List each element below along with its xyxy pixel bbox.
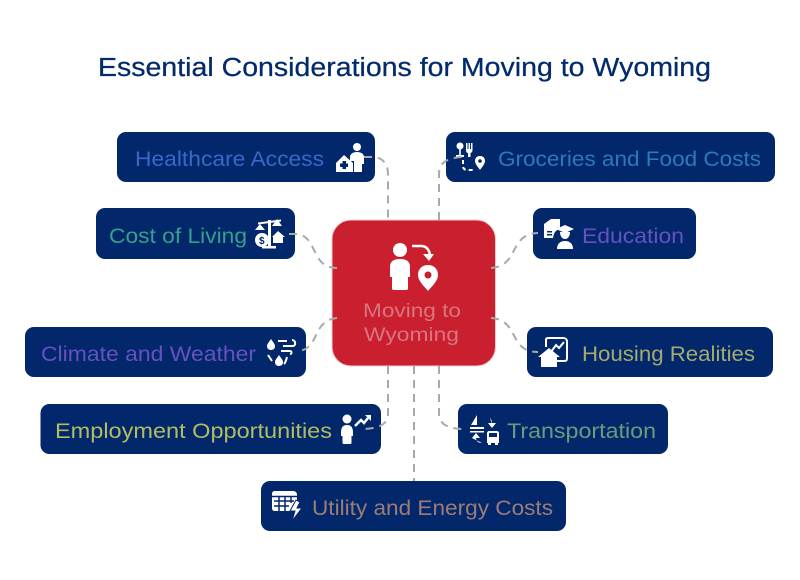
panel: employment opportunities [40, 404, 381, 454]
panel: cost of living: Cost of Living [109, 225, 247, 248]
center label: Wyoming [364, 324, 459, 346]
panel: groceries and food costs [446, 132, 775, 182]
icon: employment growth [341, 414, 371, 444]
panel: utility and energy costs [261, 481, 566, 531]
icon: healthcare [336, 143, 364, 172]
center label [363, 300, 461, 346]
panel: central hub [332, 220, 496, 366]
panel: utility and energy costs: Utility and Energy Costs [312, 497, 553, 520]
panel: education: Education [582, 225, 684, 248]
icon: transportation [470, 415, 499, 445]
panel: housing realities: Housing Realities [582, 343, 755, 366]
connectors [289, 157, 538, 481]
panel: housing realities [527, 327, 773, 377]
panel: healthcare access: Healthcare Access [135, 148, 324, 171]
panel: employment opportunities: Employment Opportunities [55, 420, 332, 443]
title: Essential Considerations for Moving to Wyoming [98, 54, 711, 82]
panel: healthcare access [117, 132, 375, 182]
icon: person moving to location pin [390, 243, 438, 291]
icon: climate [267, 339, 295, 366]
icon: housing chart [538, 338, 567, 367]
panel: climate and weather [25, 327, 306, 377]
panel: climate and weather: Climate and Weather [41, 343, 256, 366]
panel: education [533, 208, 696, 259]
panel: transportation [458, 404, 668, 454]
panel: groceries and food costs: Groceries and Food Costs [498, 148, 761, 171]
icon: education [544, 219, 574, 249]
panel: cost of living [96, 208, 295, 259]
icon: cost of living scales: $ [259, 236, 265, 247]
icon: utility bill and bolt [272, 491, 302, 521]
center label: Moving to [363, 300, 461, 322]
icon: groceries route [456, 142, 485, 170]
icon: cost of living scales [255, 219, 285, 248]
panel: transportation: Transportation [507, 420, 656, 443]
